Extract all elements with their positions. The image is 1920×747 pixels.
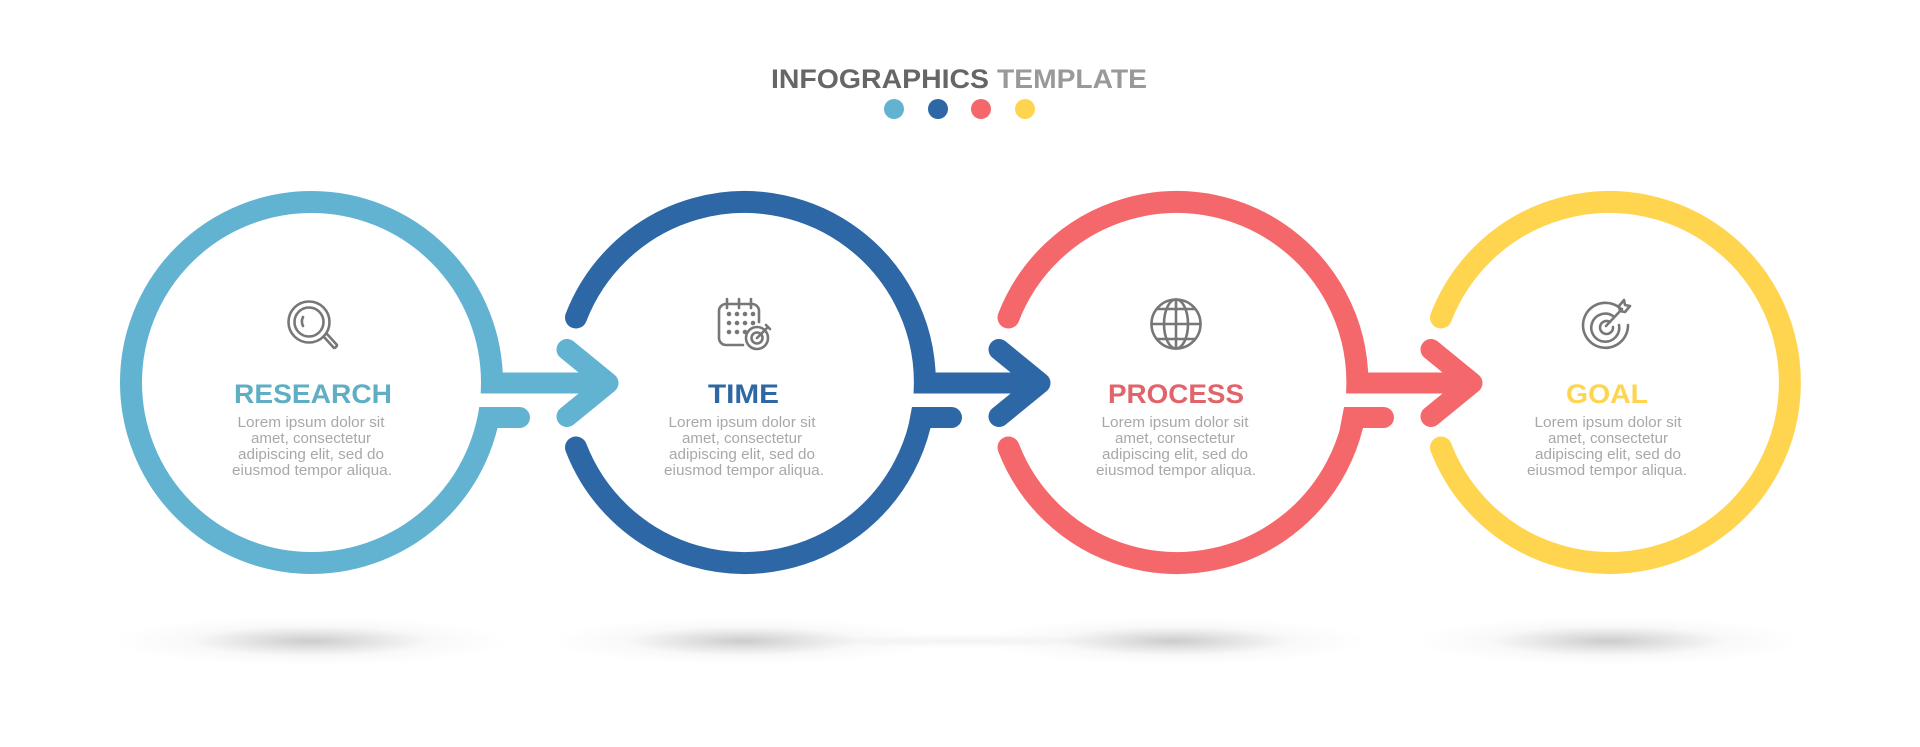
heading: time: TIME xyxy=(708,379,779,409)
color dots xyxy=(884,99,1035,119)
heading: research: RESEARCH xyxy=(234,379,392,409)
text: time: amet, consectetur xyxy=(682,431,802,447)
text: time: eiusmod tempor aliqua. xyxy=(664,463,824,479)
step 1: research xyxy=(131,202,608,563)
text: research xyxy=(232,415,392,479)
icon: target xyxy=(1583,300,1630,348)
icon: globe xyxy=(1152,300,1200,348)
text: goal xyxy=(1527,415,1687,479)
heading: process: PROCESS xyxy=(1108,379,1244,409)
text: goal: Lorem ipsum dolor sit xyxy=(1534,415,1682,431)
text: time: adipiscing elit, sed do xyxy=(669,447,815,463)
step 4: goal xyxy=(1441,202,1790,563)
icon: calendar with target xyxy=(719,299,770,349)
heading: goal: GOAL xyxy=(1566,379,1648,409)
text: goal: amet, consectetur xyxy=(1548,431,1668,447)
step 3: process xyxy=(1008,202,1472,563)
text: process: eiusmod tempor aliqua. xyxy=(1096,463,1256,479)
text: research: amet, consectetur xyxy=(251,431,371,447)
ring: goal xyxy=(1441,202,1790,563)
text: research: eiusmod tempor aliqua. xyxy=(232,463,392,479)
floor shadows xyxy=(110,616,1803,666)
text: research: adipiscing elit, sed do xyxy=(238,447,384,463)
title xyxy=(771,64,1147,94)
text: process xyxy=(1096,415,1256,479)
step 2: time xyxy=(576,202,1040,563)
text: process: Lorem ipsum dolor sit xyxy=(1102,415,1248,431)
icon: magnifier xyxy=(288,302,337,348)
title: TEMPLATE xyxy=(997,64,1147,94)
text: goal: adipiscing elit, sed do xyxy=(1535,447,1681,463)
ring and arrow: research xyxy=(131,202,608,563)
title: INFOGRAPHICS xyxy=(771,64,989,94)
text: time xyxy=(664,415,824,479)
text: process: amet, consectetur xyxy=(1115,431,1235,447)
text: time: Lorem ipsum dolor sit xyxy=(668,415,816,431)
text: research: Lorem ipsum dolor sit xyxy=(238,415,384,431)
ring and arrow: time xyxy=(576,202,1040,563)
ring and arrow: process xyxy=(1008,202,1472,563)
text: process: adipiscing elit, sed do xyxy=(1102,447,1248,463)
text: goal: eiusmod tempor aliqua. xyxy=(1527,463,1687,479)
